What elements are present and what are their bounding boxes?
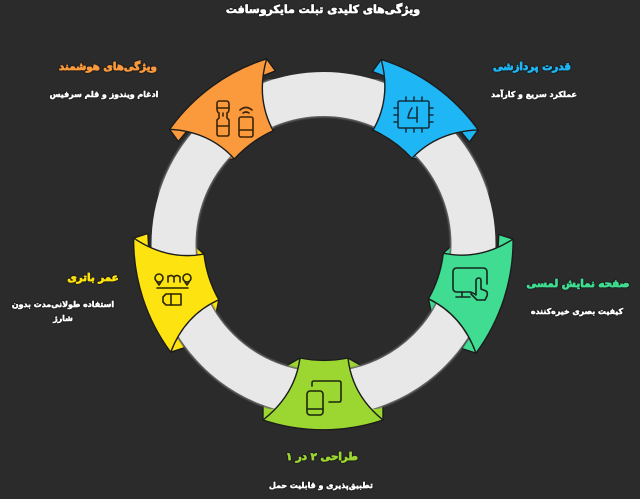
panel: yellow tile <box>124 219 230 355</box>
text: touch display <box>527 278 630 316</box>
panel: green tile <box>417 220 522 356</box>
icon: pen and smart device <box>217 101 253 137</box>
text: battery life: استفاده طولانی‌مدت بدون <box>12 300 114 309</box>
text: processing power <box>491 61 577 99</box>
text: smart features <box>50 60 159 100</box>
text: battery life: شارژ <box>52 314 73 323</box>
text: battery life: عمر باتری <box>67 272 119 284</box>
title: ویژگی‌های کلیدی تبلت مایکروسافت <box>226 3 420 16</box>
text: touch display: کیفیت بصری خیره‌کننده <box>531 307 623 316</box>
icon: touch monitor <box>453 268 487 300</box>
text: two-in-one design: تطبیق‌پذیری و قابلیت حمل <box>269 481 373 490</box>
text: two-in-one design <box>269 451 373 490</box>
gray ring <box>174 94 474 394</box>
text: processing power: عملکرد سریع و کارآمد <box>491 89 577 99</box>
text: smart features: ادغام ویندوز و قلم سرفیس <box>50 90 159 100</box>
panel: lime tile <box>263 358 383 430</box>
icon: two-in-one devices <box>307 381 341 415</box>
text: touch display: صفحه نمایش لمسی <box>527 278 630 290</box>
text: smart features: ویژگی‌های هوشمند <box>59 60 157 73</box>
panel: orange tile <box>164 51 303 180</box>
tile fold wings <box>134 59 513 420</box>
text: battery life <box>12 272 119 323</box>
text: processing power: قدرت پردازشی <box>493 61 571 73</box>
icon: processor chip <box>394 97 433 132</box>
text: two-in-one design: طراحی ۲ در ۱ <box>286 451 358 463</box>
panel: blue tile <box>345 51 484 180</box>
icon: battery and stand <box>155 274 191 305</box>
